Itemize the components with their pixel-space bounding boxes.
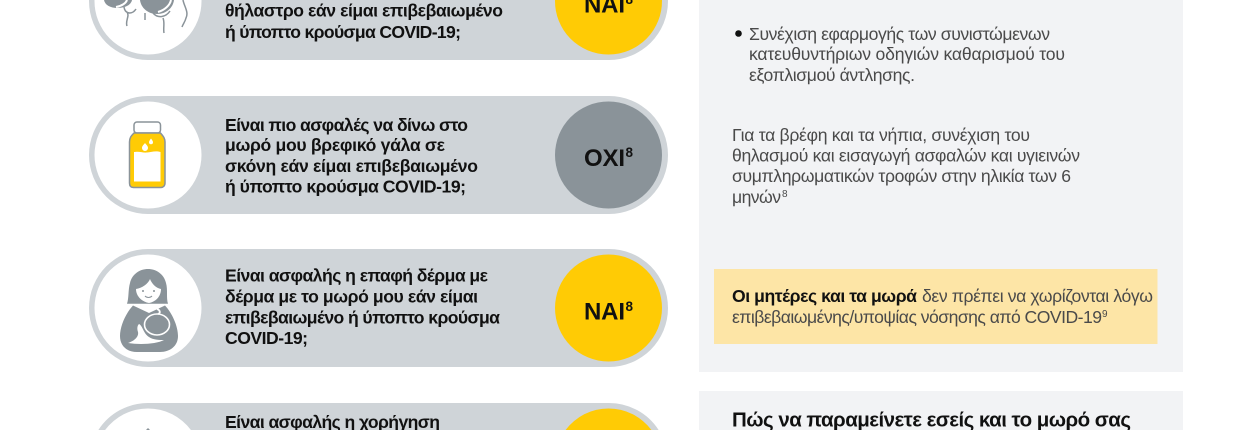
text: question 1: θήλαστρο εάν είμαι επιβεβαιωμένο — [225, 0, 503, 20]
answer badge: yes — [566, 408, 651, 430]
panel: how to stay safe — [699, 391, 1183, 430]
text: infant feeding: θηλασμού και εισαγωγή ασφαλών και υγιεινών — [732, 146, 1080, 166]
answer badge: yes — [555, 0, 662, 55]
text: question 3: COVID-19; — [225, 328, 308, 348]
bullet: pump cleaning: Συνέχιση εφαρμογής των συνιστώμενων — [749, 24, 1050, 44]
answer badge: no: 8 — [626, 145, 634, 160]
panel: question row, breast pump — [89, 0, 668, 60]
callout: mothers and babies — [714, 269, 1158, 344]
text: infant feeding: συμπληρωματικών τροφών στην ηλικία των 6 — [732, 166, 1071, 186]
answer badge: no: ΟΧΙ — [584, 145, 625, 172]
text: question 3: Είναι ασφαλής η επαφή δέρμα με — [225, 266, 489, 286]
text: question 2: Είναι πιο ασφαλές να δίνω στο — [225, 115, 468, 135]
text: question 1: ή ύποπτο κρούσμα COVID-19; — [225, 22, 461, 42]
callout: mothers and babies: 9 — [1102, 309, 1108, 320]
text: question 3: επιβεβαιωμένο ή ύποπτο κρούσμα — [225, 308, 500, 328]
text: infant feeding: 8 — [782, 189, 788, 200]
panel: question row, infant formula — [89, 96, 668, 214]
icon: cropped tip — [146, 428, 150, 430]
text: question 1 — [225, 0, 503, 42]
text: infant feeding — [732, 125, 1080, 207]
text: infant feeding: Για τα βρέφη και τα νήπια, συνέχιση του — [732, 125, 1030, 145]
bullet: pump cleaning: κατευθυντήριων οδηγιών καθαρισμού του — [749, 44, 1065, 64]
text: question 2 — [225, 115, 478, 197]
text: infant feeding: μηνών — [732, 187, 781, 207]
callout: mothers and babies: επιβεβαιωμένης/υποψίας νόσησης από COVID-19 — [732, 307, 1102, 327]
text: question 2: ή ύποπτο κρούσμα COVID-19; — [225, 177, 466, 197]
bullet: pump cleaning — [735, 24, 1065, 85]
bullet: pump cleaning: εξοπλισμού άντλησης. — [749, 65, 915, 85]
panel: recommendations — [699, 0, 1183, 372]
text: question 3: δέρμα με το μωρό μου εάν είμαι — [225, 287, 478, 307]
answer badge: yes — [555, 254, 662, 362]
callout: mothers and babies: Οι μητέρες και τα μωρά — [732, 286, 917, 306]
text: question 3 — [225, 266, 500, 348]
panel: question row, cropped at bottom — [98, 403, 659, 430]
answer badge: yes: 8 — [626, 299, 634, 314]
icon: breast pump — [104, 0, 187, 33]
panel: question row, skin-to-skin contact — [89, 249, 668, 367]
answer badge: no — [555, 102, 662, 208]
callout: mothers and babies: δεν πρέπει να χωρίζονται λόγω — [922, 286, 1153, 306]
icon: mother holding baby — [120, 269, 178, 352]
answer badge: yes: ΝΑΙ — [584, 298, 625, 326]
text: question 2: μωρό μου βρεφικό γάλα σε — [225, 135, 446, 155]
text: question 2: σκόνη εάν είμαι επιβεβαιωμένο — [225, 156, 478, 176]
icon: formula jar — [130, 122, 165, 188]
